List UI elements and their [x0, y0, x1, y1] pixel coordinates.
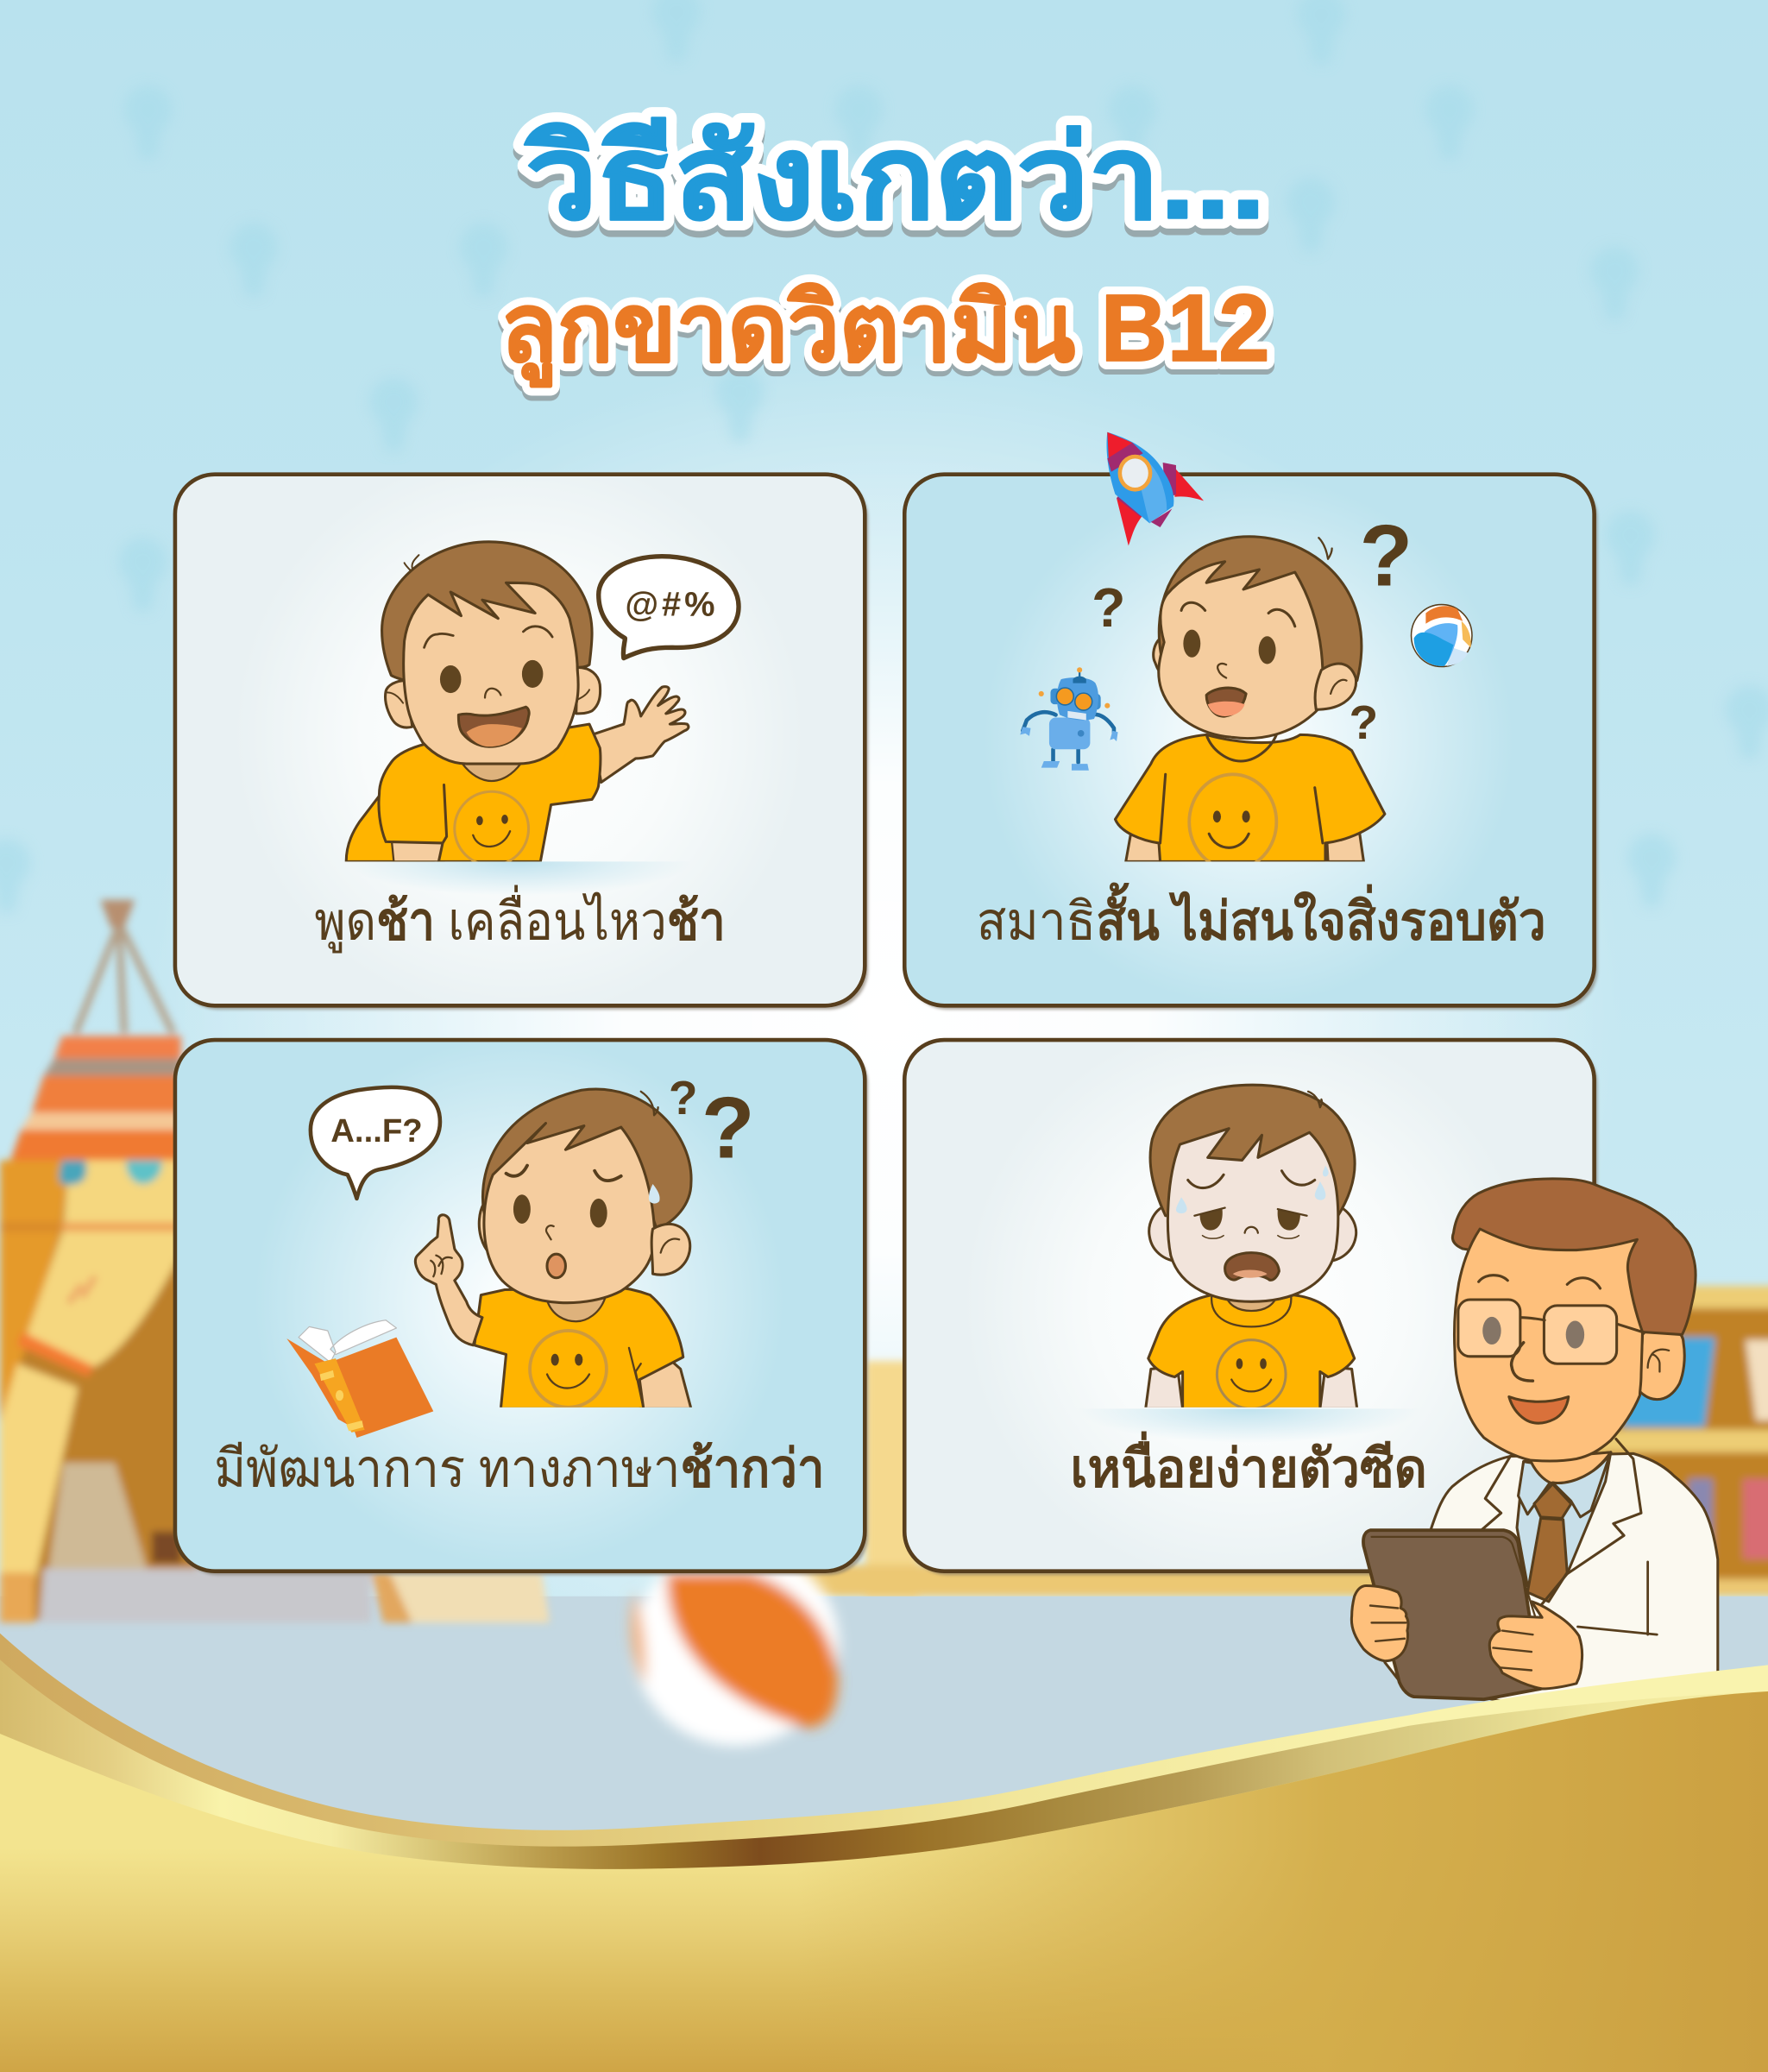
speech bubble: @#% [625, 586, 714, 624]
question marks: ? [1360, 507, 1413, 604]
question marks: ? [1350, 696, 1378, 749]
panel: short attention span [904, 432, 1597, 1010]
gold wave [0, 1634, 1768, 2072]
tablet [1363, 1530, 1541, 1699]
title line 1: วิธีสังเกตว่า... [524, 119, 1266, 249]
question marks: ? [669, 1071, 698, 1124]
question marks [1092, 507, 1413, 749]
teepee: poles [75, 928, 173, 1033]
doctor body and coat [1385, 1439, 1718, 1704]
illustration: talking child [346, 542, 689, 866]
title line 2: ลูกขาดวิตามิน B12 [500, 275, 1270, 387]
panel: speaks and moves slowly [175, 475, 868, 1010]
icon: robot [1020, 667, 1118, 771]
background: blurred teepee tent [0, 900, 550, 1622]
doctor head [1452, 1179, 1696, 1461]
wave: outer rim [0, 1634, 1768, 2072]
panel: tired and pale [904, 1040, 1597, 1575]
panel: slower language development [175, 1040, 868, 1575]
illustration: distracted child [1115, 537, 1385, 870]
glasses [1458, 1300, 1643, 1363]
illustration: tired child [1146, 1085, 1357, 1408]
illustration: unsure child pointing up [415, 1089, 691, 1408]
question marks [669, 1071, 755, 1176]
speech bubble [311, 1087, 440, 1199]
caption: มีพัฒนาการ ทางภาษาช้ากว่า [214, 1439, 825, 1498]
title line 1: วิธีสังเกตว่า... [524, 113, 1266, 243]
background: blurred beach ball [631, 1545, 839, 1746]
wave: metallic band [0, 1659, 1768, 2072]
icon: beach ball [1412, 605, 1472, 667]
title line 2: ลูกขาดวิตามิน B12 [500, 280, 1270, 393]
background: blurred bulb pattern [0, 0, 1768, 912]
title line 1: วิธีสังเกตว่า... [524, 113, 1266, 243]
question marks: ? [1092, 576, 1125, 639]
illustration: doctor [1351, 1179, 1718, 1704]
question marks: ? [702, 1080, 755, 1176]
caption: สมาธิสั้น ไม่สนใจสิ่งรอบตัว [977, 883, 1546, 951]
caption: เหนื่อยง่ายตัวซีด [1070, 1432, 1427, 1498]
speech bubble [599, 557, 739, 658]
speech bubble: A...F? [330, 1112, 423, 1149]
caption: พูดช้า เคลื่อนไหวช้า [314, 885, 726, 954]
title [500, 113, 1270, 393]
title line 2: ลูกขาดวิตามิน B12 [500, 275, 1270, 387]
background: blurred bookshelf and table [740, 1286, 1768, 1599]
icon: rocket [1106, 432, 1204, 545]
wave: body [0, 1691, 1768, 2072]
doctor hands [1351, 1586, 1582, 1689]
background: floor [0, 1597, 1768, 1890]
icon: open book [286, 1320, 433, 1438]
